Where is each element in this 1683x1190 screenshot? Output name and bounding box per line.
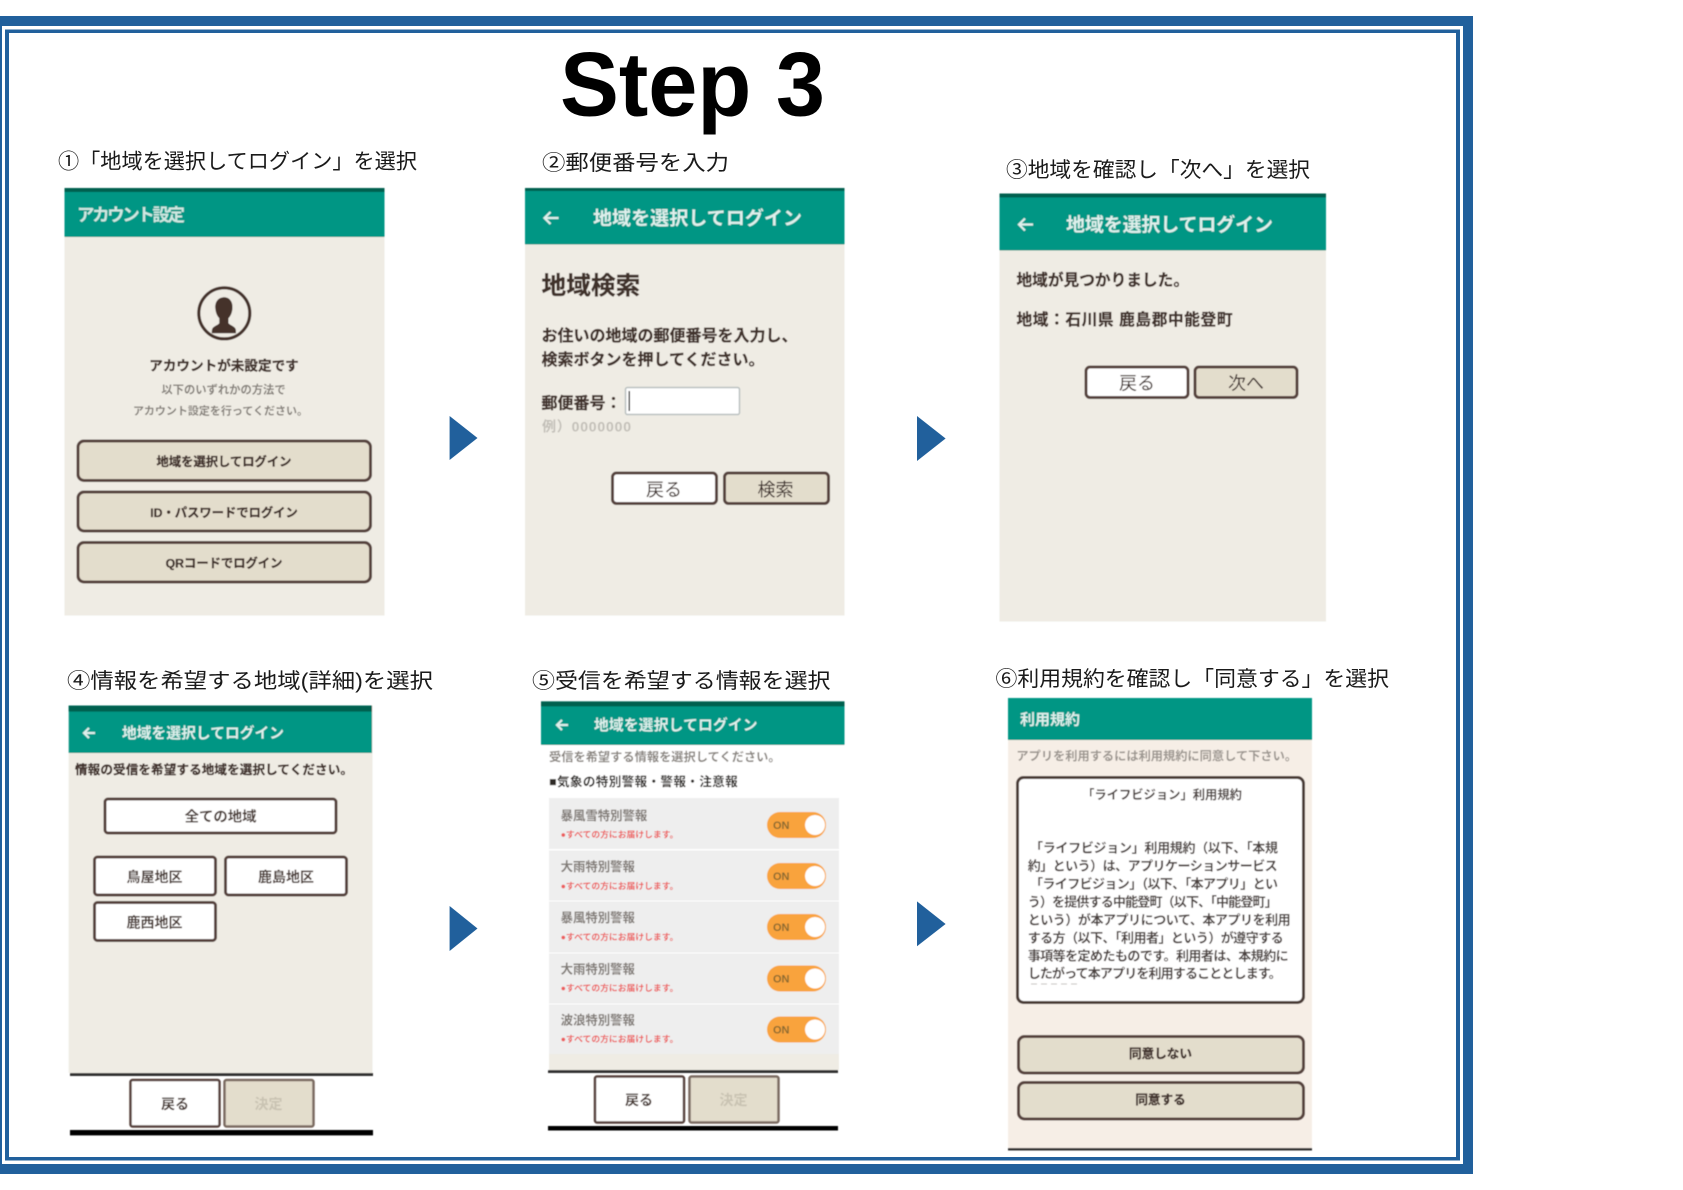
terms text box: する方（以下、「利用者」という）が遵守する [1028,930,1284,946]
step 5 label: ⑤受信を希望する情報を選択 [532,670,830,693]
button: Rokusei district [94,902,216,940]
panel: step 1 account screen: アカウント設定 [77,205,185,225]
panel: step 1 account screen: アカウント設定を行ってください。 [133,404,308,418]
button: ID password login: ID・パスワードでログイン [150,505,298,520]
terms text box: 「ライフビジョン」利用規約（以下、「本規 [1030,840,1278,856]
panel: step 2 postal code screen: お住いの地域の郵便番号を入力し、 [542,326,798,345]
panel: step 6 terms of use screen: アプリを利用するには利用規約に同意して下さい。 [1016,748,1297,763]
panel: step 5 information selection screen: 受信を希望する情報を選択してください。 [549,749,781,764]
panel: step 4 detailed region screen: 情報の受信を希望する地域を選択してください。 [75,762,353,777]
panel: step 1 account screen [64,188,384,616]
panel: step 6 terms of use screen: 利用規約 [1020,712,1080,728]
button: search [724,473,828,504]
icon: back arrow [1019,218,1033,230]
panel: step 5 information selection screen [541,701,844,1130]
button: back: 戻る [161,1096,189,1112]
button: decide (disabled): 決定 [720,1092,748,1108]
button: decide (disabled) [690,1076,778,1122]
button: Kashima district [226,857,346,895]
icon: account silhouette [199,288,250,339]
list row: high wave warning: ●すべての方にお届けします。 [561,1033,678,1044]
list row: heavy rain warning: 大雨特別警報 [561,962,636,976]
terms text box [1018,778,1304,1002]
button: back [612,473,716,504]
list row: storm warning: 暴風特別警報 [561,910,636,925]
button: Toriya district [94,857,216,895]
list row: heavy rain warning: ON [773,974,790,986]
panel: step 3 region found screen: 地域：石川県 鹿島郡中能登町 [1016,310,1233,329]
terms text box: 約」という）は、アプリケーションサービス [1028,858,1278,874]
panel: step 2 postal code screen [525,188,844,616]
list row: high wave warning: 波浪特別警報 [561,1012,636,1028]
panel: step 2 postal code screen: 地域検索 [542,272,640,300]
panel: step 3 region found screen [1000,194,1326,622]
step 2 label: ②郵便番号を入力 [542,152,729,175]
list row: high wave warning: ON [773,1024,790,1036]
button: back: 戻る [625,1092,653,1108]
button: back [130,1080,220,1126]
list row: high wave warning [549,1004,839,1054]
title: Step 3 [560,34,825,136]
button: back [1086,367,1188,398]
button: all regions: 全ての地域 [185,808,257,826]
button: agree [1018,1082,1304,1119]
step 1 label: ①「地域を選択してログイン」を選択 [58,150,417,174]
list row: heavy rain warning: ●すべての方にお届けします。 [561,982,678,993]
icon: back arrow [557,720,568,730]
panel: step 1 account screen: 以下のいずれかの方法で [161,383,286,397]
arrow: step 4 to 5 [450,906,478,951]
button: back: 戻る [1119,374,1155,394]
button: Toriya district: 鳥屋地区 [126,869,182,885]
panel: step 3 region found screen: 地域が見つかりました。 [1016,270,1189,290]
button: region login [78,441,370,480]
list row: heavy rain warning [549,850,839,900]
panel: step 3 region found screen: 地域を選択してログイン [1066,213,1273,236]
list row: heavy rain warning: 大雨特別警報 [561,859,636,874]
panel: step 4 detailed region screen [69,706,373,1135]
arrow: step 2 to 3 [917,416,946,461]
button: decide (disabled) [224,1080,314,1126]
terms text box: う）を提供する中能登町（以下、「中能登町」 [1028,894,1278,910]
terms text box: 「ライフビジョン」（以下、「本アプリ」とい [1030,876,1278,892]
arrow: step 5 to 6 [917,901,946,946]
list row: heavy rain warning [549,954,839,1004]
button: QR code login: QRコードでログイン [166,556,282,570]
panel: step 2 postal code screen: 地域を選択してログイン [593,206,802,230]
button: agree: 同意する [1135,1092,1186,1107]
list row: storm warning: ON [773,922,790,934]
button: QR code login [78,542,370,582]
terms text box: という）が本アプリについて、本アプリを利用 [1028,912,1291,928]
icon: back arrow [544,212,558,224]
panel: step 2 postal code screen: 郵便番号： [542,394,622,412]
button: next [1195,367,1297,398]
list row: storm snow warning [549,798,839,849]
button: back: 戻る [646,480,682,500]
button: next: 次へ [1228,374,1264,394]
step 3 label: ③地域を確認し「次へ」を選択 [1006,159,1310,182]
button: Kashima district: 鹿島地区 [258,869,314,885]
list row: heavy rain warning: ON [773,871,790,883]
button: decide (disabled): 決定 [254,1096,282,1112]
panel: step 6 terms of use screen [1008,698,1312,1150]
arrow: step 1 to 2 [450,416,478,460]
terms text box: 事項等を定めたものです。利用者は、本規約に [1028,948,1289,964]
button: do not agree: 同意しない [1129,1046,1192,1061]
terms text box: 「ライフビジョン」利用規約 [1082,787,1242,802]
panel: step 2 postal code screen: 検索ボタンを押してください。 [542,350,765,369]
panel: step 5 information selection screen: ■気象の特別警報・警報・注意報 [549,774,738,789]
list row: storm warning [549,902,839,952]
button: region login: 地域を選択してログイン [157,454,291,469]
button: ID password login [78,492,370,531]
list row: storm snow warning: ON [773,820,790,832]
panel: step 4 detailed region screen: 地域を選択してログイン [122,724,284,742]
terms text box: したがって本アプリを利用することとします。 [1028,966,1282,981]
list row: storm snow warning: ●すべての方にお届けします。 [561,829,678,840]
button: back [595,1076,684,1122]
panel: step 2 postal code screen: 例）0000000 [542,418,631,434]
list row: storm warning: ●すべての方にお届けします。 [561,931,678,942]
list row: storm snow warning: 暴風雪特別警報 [561,808,648,823]
panel: step 5 information selection screen: 地域を選択してログイン [594,716,758,734]
step 6 label: ⑥利用規約を確認し「同意する」を選択 [996,668,1389,691]
panel: step 1 account screen: アカウントが未設定です [149,358,299,374]
step 4 label: ④情報を希望する地域(詳細)を選択 [67,670,433,693]
postal code input [626,388,740,414]
button: Rokusei district: 鹿西地区 [126,914,182,930]
button: all regions [105,799,336,833]
list row: heavy rain warning: ●すべての方にお届けします。 [561,880,678,891]
icon: back arrow [84,728,95,738]
button: search: 検索 [758,480,794,500]
button: do not agree [1018,1036,1304,1073]
